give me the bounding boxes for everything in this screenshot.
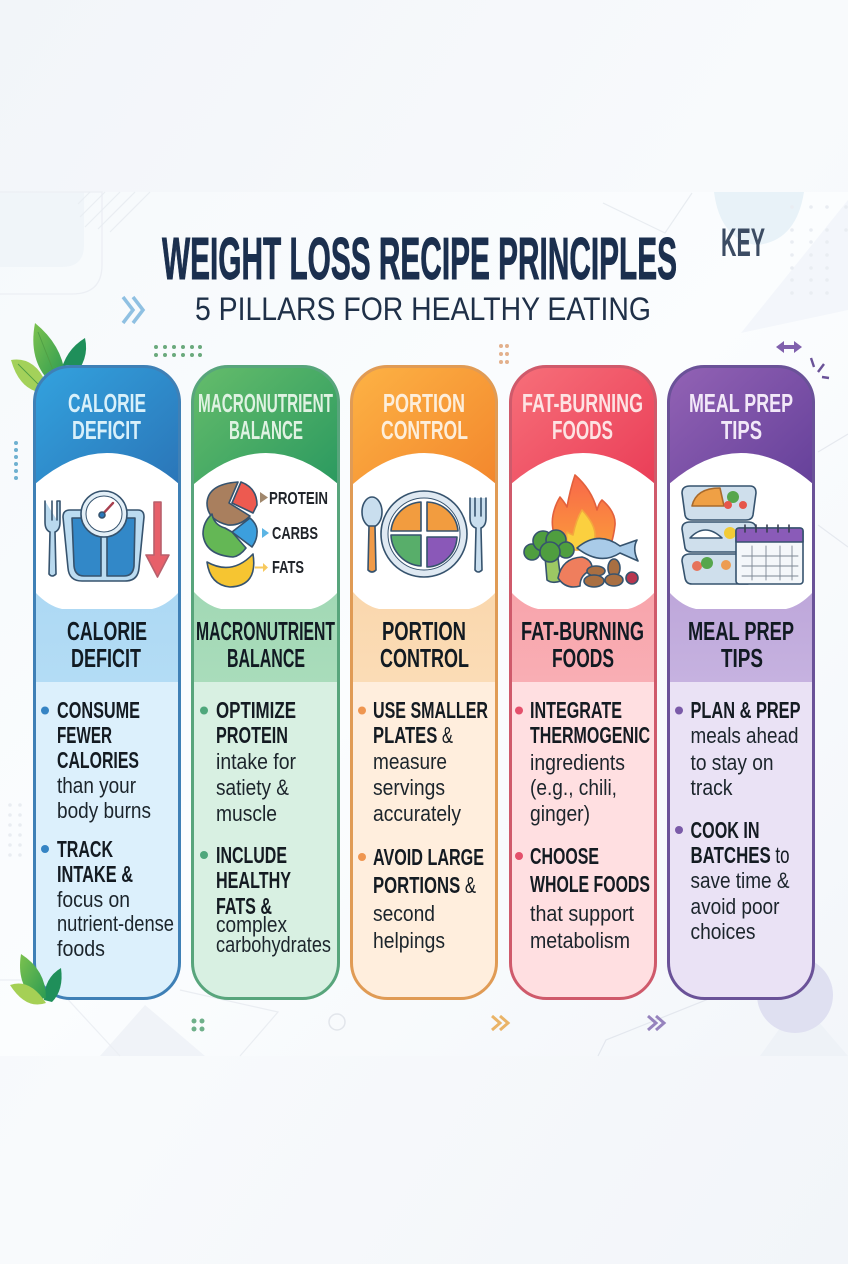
decorative orange dots [499,344,509,364]
white icon area [669,453,813,609]
bullet text 2: FATS & [216,893,272,919]
bullet text 2: helpings [373,928,445,953]
bullet text 2: WHOLE FOODS [530,871,650,897]
card header [68,390,146,445]
bullet text 1: PLATES & [373,722,453,748]
white icon area [353,453,496,609]
macronutrient labels: PROTEIN [269,488,328,508]
bullet text 1 [515,697,650,826]
bullet text 2: choices [690,919,756,944]
card header: FAT-BURNING [522,390,643,418]
bullet text 1: OPTIMIZE [216,697,296,723]
subtitle band text [67,618,147,673]
bullet text 2: INTAKE & [57,861,133,887]
card header: CALORIE [68,390,146,418]
bullet text 1: measure [373,749,447,774]
icon: portion plate [362,491,486,577]
bullet text 2: metabolism [530,928,630,953]
bullet text 1: FEWER [57,722,112,748]
card header: PORTION [383,390,465,418]
white icon area [194,453,338,609]
bullet text 1: (e.g., chili, [530,775,617,800]
subtitle band text: DEFICIT [71,645,141,673]
card header: FOODS [552,417,613,445]
card header [381,390,468,445]
subtitle band text: PORTION [382,618,466,646]
bullet text 2: save time & [690,868,790,893]
panel: macronutrient balance [191,365,340,1000]
bullet text 1: than your [57,773,136,798]
subtitle: 5 PILLARS FOR HEALTHY EATING [195,291,651,327]
macronutrient labels [269,488,328,577]
macronutrient labels: FATS [272,557,304,577]
card header: MACRONUTRIENT [198,390,333,418]
bullet text 2: AVOID LARGE [373,844,484,870]
icon: scale fork arrow [45,491,169,581]
subtitle band text: CALORIE [67,618,147,646]
bullet text 1 [41,697,151,823]
bullet text 2: BATCHES to [690,842,790,868]
bullet text 2: nutrient-dense [57,911,174,936]
bullet text 1: track [690,775,733,800]
bullet text 1: USE SMALLER [373,697,488,723]
bullet text 1: satiety & [216,775,289,800]
icon: blue chevrons [123,297,143,323]
card header: MEAL PREP [689,390,793,418]
bullet text 2 [515,843,650,953]
bullet text 2 [200,842,331,957]
bullet text 1: accurately [373,801,462,826]
bullet text 2: foods [57,936,105,961]
bullet text 1: CONSUME [57,697,140,723]
bullet text 1: servings [373,775,445,800]
bullet text 2: complex [216,912,288,937]
bullet text 2: that support [530,901,635,926]
bullet text 2: PORTIONS & [373,872,476,898]
white icon area [35,453,179,609]
decorative dots left [14,441,18,480]
panel: portion control [350,365,498,1000]
bullet text 1 [675,697,800,800]
icon: orange chevrons [492,1016,508,1030]
subtitle band text: MEAL PREP [688,618,794,646]
bullet text 2: CHOOSE [530,843,599,869]
bullet text 1: PLAN & PREP [690,697,800,723]
subtitle band text: BALANCE [227,645,305,673]
icon: bottom leaves [10,954,62,1005]
key label: KEY [721,221,765,265]
icon: fire and foods [524,475,638,587]
subtitle band text [380,618,469,673]
subtitle band text: CONTROL [380,645,469,673]
bullet text 1: muscle [216,801,277,826]
icon: purple double arrow [776,341,802,353]
subtitle band text [688,618,794,673]
bullet text 1: ingredients [530,750,625,775]
bullet text 1 [200,697,296,826]
bullet text 1: to stay on [690,750,774,775]
subtitle band text [196,618,335,673]
bullet text 1: intake for [216,749,296,774]
panel: fat-burning foods [509,365,657,1000]
bullet text 1 [358,697,488,826]
decorative dots bottom [192,1018,204,1032]
bullet text 2: COOK IN [690,817,760,843]
card header: TIPS [721,417,762,445]
subtitle band text: FOODS [552,645,614,673]
white icon area [511,453,655,609]
bullet text 1: ginger) [530,801,590,826]
decorative green dots [154,345,202,357]
subtitle band text: TIPS [721,645,763,673]
bullet text 2 [41,836,174,961]
bullet text 2 [675,817,790,944]
bullet text 2: focus on [57,887,130,912]
card header [198,390,333,445]
bullet text 1: body burns [57,798,151,823]
subtitle band text: FAT-BURNING [521,618,644,646]
card header: CONTROL [381,417,468,445]
bullet text 1: meals ahead [690,723,798,748]
subtitle band text: MACRONUTRIENT [196,618,335,646]
icon: macronutrient pie chart [203,482,269,587]
bullet text 2: INCLUDE [216,842,287,868]
bullet text 2: carbohydrates [216,932,331,957]
icon: top leaves [11,323,86,391]
bullet text 2 [358,844,484,953]
subtitle band text [521,618,644,673]
bullet text 2: HEALTHY [216,867,291,893]
bullet text 1: CALORIES [57,747,139,773]
card header [689,390,793,445]
card header: DEFICIT [72,417,141,445]
icon: meal prep containers and calendar [682,486,803,584]
panel: meal prep tips [667,365,815,1000]
macronutrient labels: CARBS [272,523,318,543]
card header [522,390,643,445]
bullet text 1: PROTEIN [216,722,288,748]
panel: calorie deficit [33,365,181,1000]
bullet text 2: avoid poor [690,894,780,919]
decorative purple rays [811,358,829,378]
bullet text 1: THERMOGENIC [530,722,650,748]
card header: BALANCE [229,417,303,445]
bullet text 2: second [373,901,435,926]
icon: purple chevrons [648,1016,664,1030]
bullet text 1: INTEGRATE [530,697,622,723]
bullet text 2: TRACK [57,836,113,862]
